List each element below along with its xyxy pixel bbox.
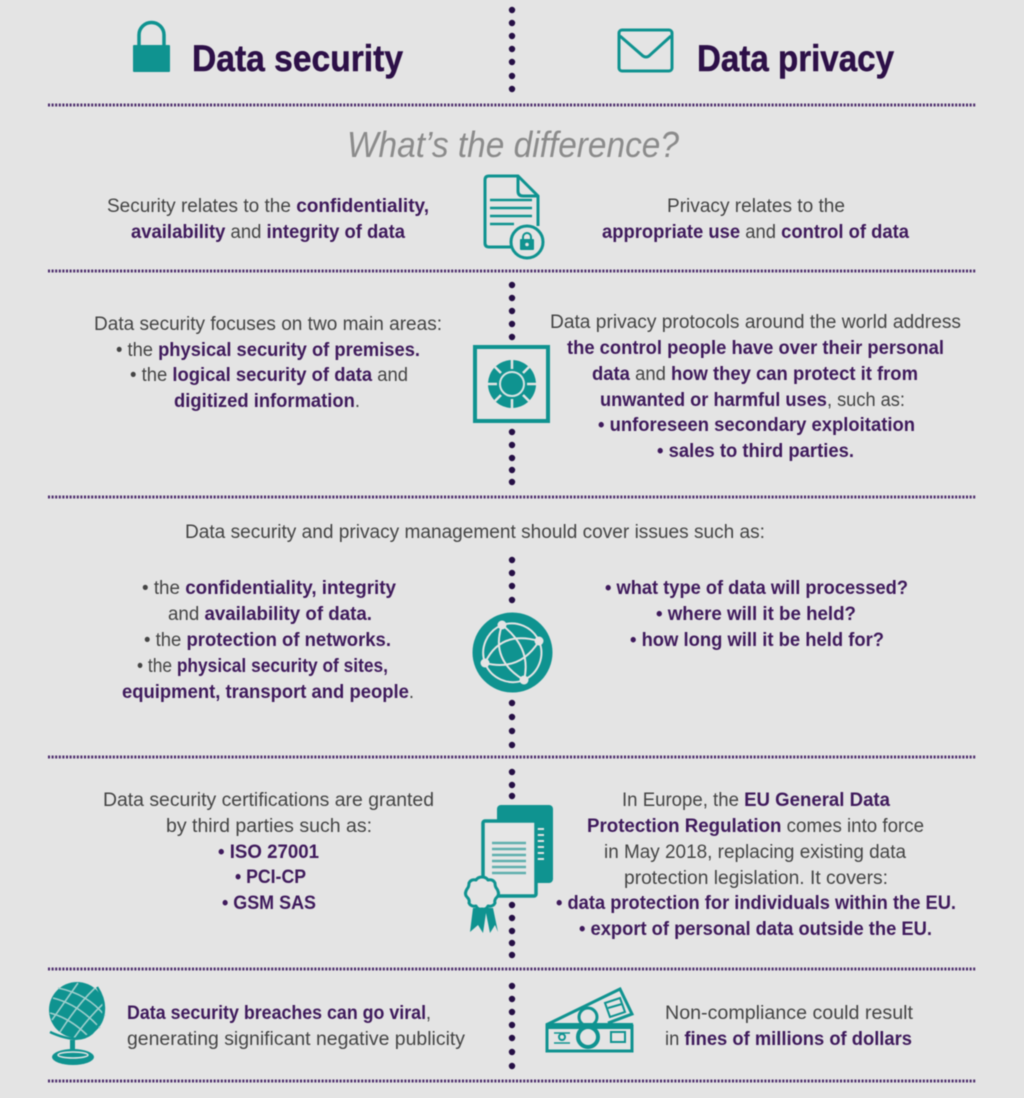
text: security definition: Security relates to the confidentiality,	[107, 196, 429, 217]
text: security certifications	[103, 790, 434, 914]
text: privacy protocols: data and how they can protect it from	[592, 364, 918, 385]
text: EU GDPR: • export of personal data outside the EU.	[579, 919, 932, 940]
subtitle: What’s the difference?	[347, 124, 679, 165]
text: breaches: Data security breaches can go viral,	[127, 1003, 431, 1024]
heading: Data security: Data security	[192, 38, 403, 79]
text: management intro: Data security and privacy management should cover issues such as:	[185, 522, 765, 543]
text: EU GDPR: protection legislation. It covers:	[624, 868, 888, 889]
text: security certifications: Data security certifications are granted	[103, 790, 434, 811]
icon: document with lock	[485, 176, 543, 258]
text: privacy protocols: the control people have over their personal	[567, 338, 944, 359]
text: non-compliance	[665, 1003, 914, 1050]
text: privacy protocols	[550, 312, 961, 462]
text: security focus areas: digitized information.	[174, 391, 360, 412]
text: privacy management issues: • what type of data will processed?	[605, 578, 908, 599]
text: security management issues: • the protection of networks.	[144, 630, 391, 651]
vertical dotted divider	[509, 7, 515, 1069]
text: security focus areas: • the physical security of premises.	[116, 340, 420, 361]
text: privacy definition	[602, 196, 909, 243]
text: privacy definition: appropriate use and control of data	[602, 222, 909, 243]
icon: safe dial	[475, 347, 548, 421]
icon: certificate documents	[466, 805, 553, 933]
text: security definition	[107, 196, 429, 243]
text: security management issues: and availability of data.	[168, 604, 372, 625]
text: security certifications: • PCI-CP	[235, 867, 306, 888]
text: EU GDPR: In Europe, the EU General Data	[622, 790, 890, 811]
text: privacy management issues	[605, 578, 908, 651]
text: security certifications: • GSM SAS	[222, 893, 316, 914]
icon: desk globe	[49, 982, 105, 1065]
text: security focus areas	[94, 314, 442, 412]
text: privacy protocols: unwanted or harmful uses, such as:	[600, 390, 905, 411]
text: privacy protocols: • sales to third parties.	[657, 441, 854, 462]
text: breaches	[127, 1003, 465, 1050]
text: privacy protocols: • unforeseen secondary exploitation	[598, 415, 915, 436]
text: EU GDPR	[556, 790, 956, 940]
text: security definition: availability and integrity of data	[131, 222, 405, 243]
text: privacy definition: Privacy relates to the	[667, 196, 845, 217]
text: breaches: generating significant negative publicity	[127, 1029, 465, 1050]
text: privacy management issues: • how long will it be held for?	[630, 630, 884, 651]
text: security focus areas: Data security focuses on two main areas:	[94, 314, 442, 335]
text: security certifications: • ISO 27001	[218, 842, 319, 863]
text: security management issues	[122, 578, 414, 703]
text: non-compliance: Non-compliance could result	[665, 1003, 914, 1024]
icon: padlock	[133, 22, 170, 72]
text: EU GDPR: Protection Regulation comes into force	[587, 816, 924, 837]
text: EU GDPR: • data protection for individuals within the EU.	[556, 893, 956, 914]
text: security management issues: equipment, transport and people.	[122, 682, 414, 703]
heading: Data privacy: Data privacy	[697, 38, 894, 79]
icon: banknotes	[546, 989, 633, 1051]
text: security certifications: by third parties such as:	[166, 816, 372, 837]
text: EU GDPR: in May 2018, replacing existing data	[604, 842, 906, 863]
text: privacy management issues: • where will it be held?	[656, 604, 856, 625]
text: security management issues: • the confidentiality, integrity	[142, 578, 396, 599]
icon: envelope	[619, 30, 672, 71]
text: security focus areas: • the logical security of data and	[130, 365, 408, 386]
icon: network globe	[472, 612, 552, 692]
text: security management issues: • the physical security of sites,	[137, 656, 388, 677]
text: privacy protocols: Data privacy protocols around the world address	[550, 312, 961, 333]
text: non-compliance: in fines of millions of dollars	[665, 1029, 912, 1050]
